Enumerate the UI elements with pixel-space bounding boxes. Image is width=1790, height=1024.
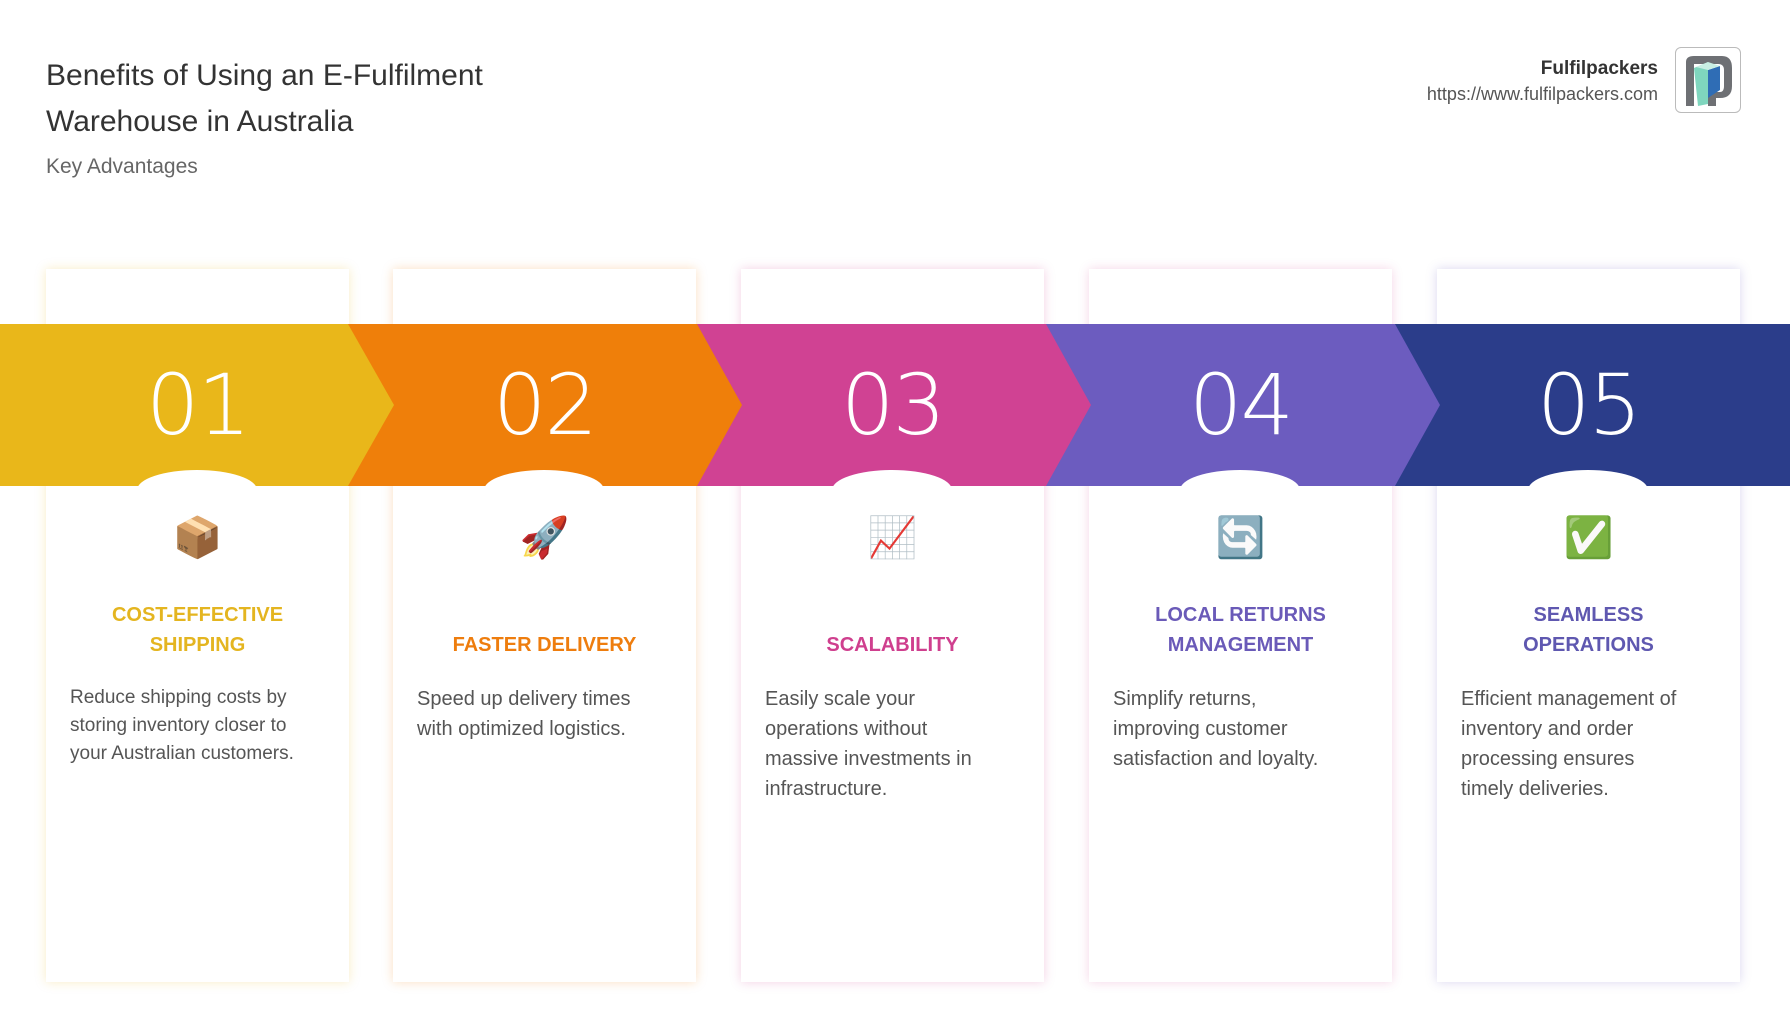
chevron band — [0, 324, 1790, 486]
text: Speed up delivery times with optimized logistics. — [417, 688, 630, 740]
icon: check: ✅ — [1564, 514, 1613, 561]
heading: COST-EFFECTIVE — [112, 604, 283, 626]
heading — [1523, 604, 1654, 656]
icon: rocket: 🚀 — [520, 514, 569, 561]
content: card 4 — [1113, 514, 1326, 770]
text: 02 — [493, 356, 596, 454]
content: card 3 — [765, 514, 972, 800]
heading: OPERATIONS — [1523, 634, 1654, 656]
content: card 2 — [417, 514, 636, 740]
content: card 1 — [70, 514, 294, 764]
panel: card 3 — [741, 269, 1044, 982]
panel: card 4 — [1089, 269, 1392, 982]
panel: card 5 — [1437, 269, 1740, 982]
content: card 5 — [1461, 514, 1676, 800]
panel: card 1 — [46, 269, 349, 982]
text: 03 — [841, 356, 944, 454]
title: Benefits of Using an E-Fulfilment — [46, 59, 483, 92]
heading: MANAGEMENT — [1168, 634, 1313, 656]
text: Efficient management of inventory and order processing ensures timely deliveries. — [1461, 688, 1676, 800]
heading — [1155, 604, 1326, 656]
text: Reduce shipping costs by storing inventory closer to your Australian customers. — [70, 687, 294, 764]
title: Warehouse in Australia — [46, 105, 353, 138]
icon: logo — [1675, 47, 1741, 113]
icon: package: 📦 — [173, 514, 222, 561]
heading: FASTER DELIVERY — [453, 634, 636, 656]
icon: chart: 📈 — [868, 514, 917, 561]
text: 01 — [146, 356, 249, 454]
heading: SEAMLESS — [1533, 604, 1644, 626]
text: 04 — [1189, 356, 1292, 454]
text: Easily scale your operations without massive investments in infrastructure. — [765, 688, 972, 800]
brand text — [1427, 58, 1658, 104]
heading — [112, 604, 283, 656]
text: Simplify returns, improving customer satisfaction and loyalty. — [1113, 688, 1318, 770]
brand text: Fulfilpackers — [1541, 58, 1658, 79]
heading: LOCAL RETURNS — [1155, 604, 1326, 626]
subtitle: Key Advantages — [46, 155, 198, 178]
panel: card 2 — [393, 269, 696, 982]
bumps — [138, 470, 1647, 486]
title — [46, 59, 483, 138]
heading: SHIPPING — [150, 634, 245, 656]
brand text: https://www.fulfilpackers.com — [1427, 84, 1658, 104]
heading: SCALABILITY — [826, 634, 959, 656]
text: 05 — [1537, 356, 1640, 454]
numbers — [146, 356, 1640, 454]
icon: returns: 🔄 — [1216, 514, 1265, 561]
